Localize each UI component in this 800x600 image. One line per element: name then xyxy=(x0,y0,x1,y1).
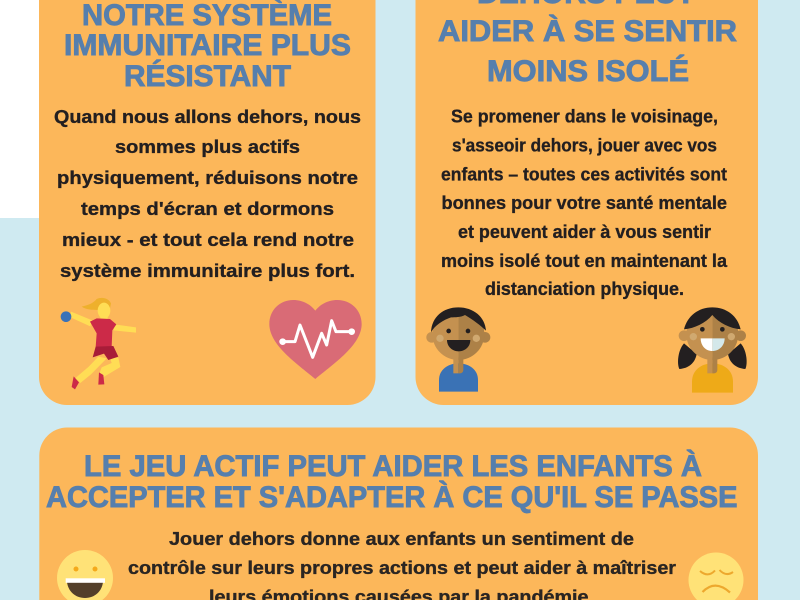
text block: immune system body: temps d'écran et dormons xyxy=(81,198,334,219)
icon: smiling boy xyxy=(426,307,490,392)
text block: immune system body: physiquement, réduisons notre xyxy=(57,167,358,188)
heading: active play: ACCEPTER ET S'ADAPTER À CE QU'IL SE PASSE xyxy=(46,480,738,514)
text block: immune system body: système immunitaire plus fort. xyxy=(60,260,355,281)
text block: feeling less isolated body: Se promener dans le voisinage, xyxy=(451,106,718,127)
text block: feeling less isolated body: et peuvent aider à vous sentir xyxy=(458,221,711,242)
icon: laughing face xyxy=(57,550,113,600)
heading: immune system: RÉSISTANT xyxy=(124,59,291,93)
text block: feeling less isolated body: moins isolé tout en maintenant la xyxy=(441,250,728,271)
text block: immune system body xyxy=(54,106,361,281)
heading: active play: LE JEU ACTIF PEUT AIDER LES ENFANTS À xyxy=(84,449,702,483)
panel: active play xyxy=(39,428,758,600)
panel: feeling less isolated xyxy=(416,0,758,405)
heading: feeling less isolated: AIDER À SE SENTIR xyxy=(438,14,737,48)
heading: immune system xyxy=(64,0,351,93)
heading: feeling less isolated: MOINS ISOLÉ xyxy=(487,54,689,88)
text block: feeling less isolated body: distanciation physique. xyxy=(485,278,684,299)
icon: sad face xyxy=(688,552,744,600)
text block: active play body: Jouer dehors donne aux enfants un sentiment de xyxy=(169,529,634,549)
text block: immune system body: sommes plus actifs xyxy=(115,136,300,157)
heading: feeling less isolated xyxy=(438,0,737,88)
icon: smiling girl xyxy=(678,307,747,393)
text block: immune system body: mieux - et tout cela rend notre xyxy=(62,229,354,250)
text block: immune system body: Quand nous allons dehors, nous xyxy=(54,106,361,127)
text block: active play body: contrôle sur leurs propres actions et peut aider à maîtriser xyxy=(128,558,676,578)
heading: active play xyxy=(46,449,738,514)
text block: feeling less isolated body: bonnes pour votre santé mentale xyxy=(442,192,727,213)
text block: feeling less isolated body xyxy=(441,106,728,299)
panel: immune system xyxy=(39,0,376,405)
text block: active play body xyxy=(128,529,676,600)
text block: feeling less isolated body: s'asseoir dehors, jouer avec vos xyxy=(452,135,717,156)
icon: heart with pulse xyxy=(269,300,362,379)
icon: handball player xyxy=(61,298,136,389)
heading: immune system: IMMUNITAIRE PLUS xyxy=(64,29,351,62)
text block: feeling less isolated body: enfants – toutes ces activités sont xyxy=(441,164,727,185)
